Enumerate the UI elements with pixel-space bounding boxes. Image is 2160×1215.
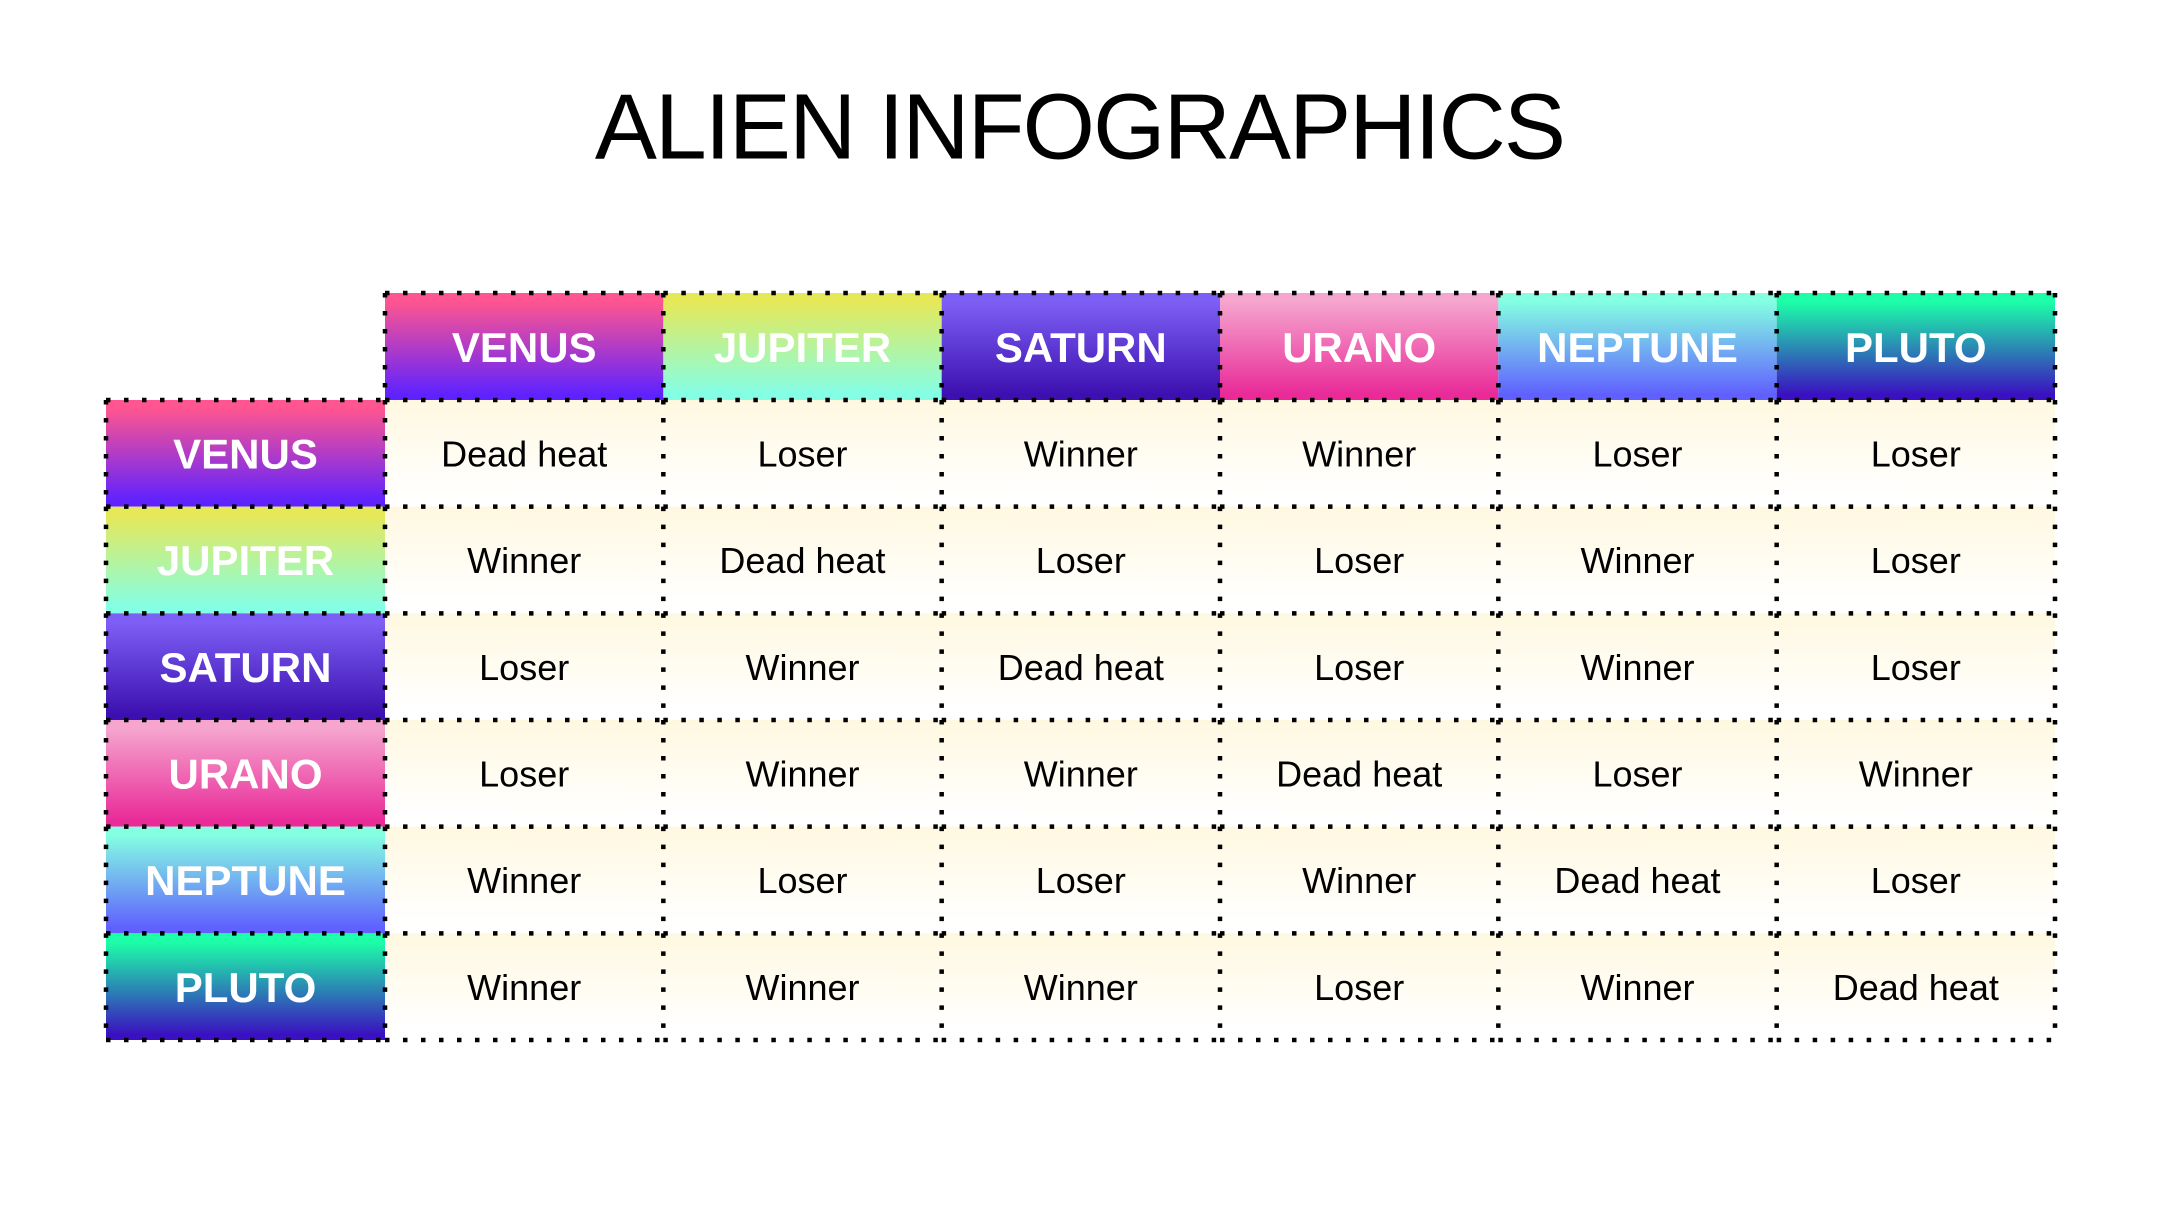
results row: Jupiter: Loser [1871,540,1961,581]
results row: Urano: Winner [1859,754,1973,794]
header: Urano: URANO [1282,324,1436,371]
results row: Neptune: Winner [1302,860,1416,901]
row header: Saturn: SATURN [160,644,331,691]
row header: Neptune: NEPTUNE [145,857,346,904]
results row: Venus: Loser [1592,434,1683,474]
header: Saturn [942,293,1220,400]
header: Urano [1220,293,1498,400]
title: ALIEN INFOGRAPHICS [595,74,1564,178]
results row: Urano: Loser [1592,754,1683,794]
results row: Urano [385,720,2055,827]
results row: Saturn [385,613,2055,720]
results row: Jupiter: Dead heat [719,540,886,581]
results row: Urano: Loser [479,754,569,794]
results row: Saturn: Loser [1314,647,1404,688]
row header: Pluto [106,933,385,1040]
results row: Neptune: Loser [1871,860,1961,901]
header: Pluto: PLUTO [1845,324,1987,371]
results row: Pluto: Winner [745,967,860,1008]
results row: Neptune [385,827,2055,933]
results row: Venus [385,400,2055,507]
results row: Pluto [385,933,2055,1040]
results row: Pluto: Loser [1314,967,1404,1008]
results row: Saturn: Dead heat [998,647,1164,688]
header: Venus: VENUS [452,324,597,371]
results row: Neptune: Loser [757,860,848,901]
results row: Neptune: Winner [467,860,581,901]
row header: Saturn [106,613,385,720]
results row: Saturn: Winner [745,647,860,688]
row header: Urano: URANO [168,750,322,798]
row header: Neptune [106,827,385,933]
results row: Saturn: Winner [1580,647,1695,688]
results row: Jupiter [385,507,2055,613]
header: Neptune [1498,293,1777,400]
header: Pluto [1777,293,2055,400]
column headers [385,293,2055,400]
row header: Pluto: PLUTO [175,964,316,1011]
header: Jupiter [663,293,942,400]
results row: Jupiter: Winner [467,540,581,581]
results row: Jupiter: Winner [1580,540,1695,581]
dotted cell borders [106,293,2055,1040]
results row: Pluto: Winner [1580,967,1695,1008]
row header: Venus [106,400,385,507]
row header: Urano [106,720,385,827]
header: Jupiter: JUPITER [714,324,891,371]
results row: Pluto: Winner [467,967,581,1008]
results row: Saturn: Loser [1871,647,1961,688]
results row: Pluto: Dead heat [1833,967,1999,1008]
results table body [385,400,2055,1040]
results row: Urano: Winner [745,754,860,794]
results row: Jupiter: Loser [1314,540,1404,581]
results row: Saturn: Loser [479,647,569,688]
results row: Urano: Winner [1024,754,1138,794]
results row: Venus: Dead heat [441,434,607,474]
row header: Jupiter [106,507,385,613]
header: Venus [385,293,663,400]
results row: Jupiter: Loser [1036,540,1126,581]
row header: Jupiter: JUPITER [157,537,334,584]
results row: Venus: Winner [1024,434,1138,474]
results row: Pluto: Winner [1024,967,1138,1008]
results row: Venus: Loser [1871,434,1961,474]
results row: Venus: Winner [1302,434,1416,474]
header: Neptune: NEPTUNE [1537,324,1738,371]
results row: Neptune: Dead heat [1554,860,1721,901]
results row: Urano: Dead heat [1276,754,1442,794]
header: Saturn: SATURN [995,324,1167,371]
row header: Venus: VENUS [173,430,318,478]
results row: Venus: Loser [757,434,848,474]
results row: Neptune: Loser [1036,860,1126,901]
row headers [106,400,385,1040]
